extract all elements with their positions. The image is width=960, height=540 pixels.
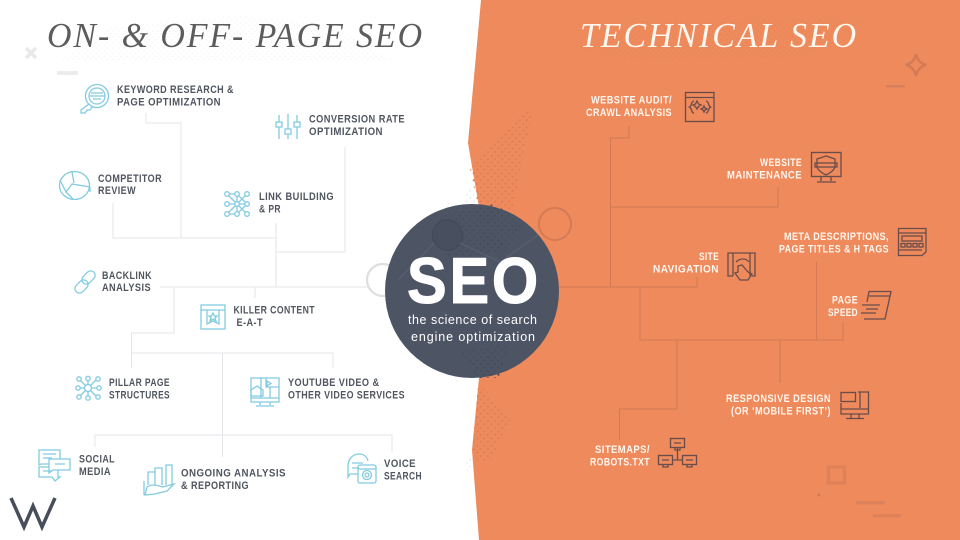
icon: speed page [861,292,891,319]
label: pillar page: PILLAR PAGE [109,377,170,389]
label: youtube video: OTHER VIDEO SERVICES [288,390,405,402]
title: technical SEO: TECHNICAL SEO [580,16,858,55]
halftone decoration [60,15,880,488]
panel: technical SEO orange background [468,0,960,540]
label: keyword research: KEYWORD RESEARCH & [117,84,234,96]
icon: pie chart [60,172,90,200]
icon: responsive devices [841,392,868,418]
SEO wordmark: SEO [407,244,541,317]
label: responsive design: (OR ‘MOBILE FIRST’) [731,406,831,418]
label: responsive design: RESPONSIVE DESIGN [726,393,831,405]
label: pillar page: STRUCTURES [109,390,170,402]
label: youtube video [288,377,405,402]
label: social media [79,454,115,478]
icon: touch screen [728,253,755,280]
label: killer content: E-A-T [236,317,263,329]
label: social media: SOCIAL [79,454,115,466]
label: competitor review [98,173,162,197]
central SEO circle [385,204,559,378]
label: backlink analysis [102,270,152,294]
label: sitemaps: SITEMAPS/ [595,444,650,456]
label: competitor review: REVIEW [98,185,136,197]
label: social media: MEDIA [79,466,111,478]
label: site navigation [653,251,719,276]
icon: sliders [276,114,300,139]
icon: link network [225,192,249,216]
label: backlink analysis: ANALYSIS [102,282,151,294]
label: website maintenance: WEBSITE [760,157,802,169]
icon: chain link [73,269,97,295]
label: website audit: CRAWL ANALYSIS [586,107,672,119]
label: voice search [384,458,422,482]
label: page speed: SPEED [828,307,858,319]
label: killer content: KILLER CONTENT [234,304,315,316]
label: website maintenance: MAINTENANCE [727,170,802,182]
label: link building: LINK BUILDING [259,191,334,203]
label: site navigation: SITE [699,251,719,263]
label: keyword research: PAGE OPTIMIZATION [117,96,221,108]
label: ongoing analysis [181,468,286,492]
tagline: engine optimization [411,330,535,344]
icon: page layout [898,228,926,256]
label: backlink analysis: BACKLINK [102,270,152,282]
icon: video screen [251,378,279,406]
label: conversion rate: OPTIMIZATION [309,126,383,138]
label: meta descriptions: META DESCRIPTIONS, [784,231,889,243]
logo: W [11,498,55,527]
label: responsive design [726,393,831,418]
label: ongoing analysis: & REPORTING [181,480,249,492]
tagline: the science of search [408,313,537,327]
label: conversion rate [309,114,405,138]
icon: content badge [201,305,225,329]
label: website maintenance [727,157,802,182]
icon: shield monitor [812,152,841,182]
label: pillar page [109,377,170,402]
icon: code window [686,92,714,122]
label: link building: & PR [259,204,281,216]
label: page speed: PAGE [832,294,858,306]
label: voice search: VOICE [384,458,416,470]
label: website audit [586,94,672,119]
label: meta descriptions: PAGE TITLES & H TAGS [779,244,889,256]
icon: pillar hub [76,376,101,400]
label: youtube video: YOUTUBE VIDEO & [288,377,380,389]
tagline [408,313,537,344]
label: link building [259,191,334,216]
label: site navigation: NAVIGATION [653,264,719,276]
label: page speed [828,294,858,319]
title: on- and off-page SEO: ON- & OFF- PAGE SEO [47,16,424,55]
label: ongoing analysis: ONGOING ANALYSIS [181,468,286,480]
label: conversion rate: CONVERSION RATE [309,114,405,126]
ring decoration right [539,208,571,240]
connector lines: on- and off-page [95,113,392,457]
icon: network monitors [658,438,696,467]
icon: voice camera [348,454,376,483]
label: sitemaps [590,444,650,468]
icon: chart in hand [144,465,174,495]
icon: keyword key [81,84,108,113]
icon: chat bubbles [39,450,70,481]
ring decoration left [367,264,399,296]
label: meta descriptions [779,231,889,256]
label: competitor review: COMPETITOR [98,173,162,185]
label: keyword research [117,84,234,108]
label: website audit: WEBSITE AUDIT/ [591,94,672,106]
label: sitemaps: ROBOTS.TXT [590,456,650,468]
connector lines: technical [559,126,843,440]
label: voice search: SEARCH [384,470,422,482]
label: killer content [234,304,315,329]
